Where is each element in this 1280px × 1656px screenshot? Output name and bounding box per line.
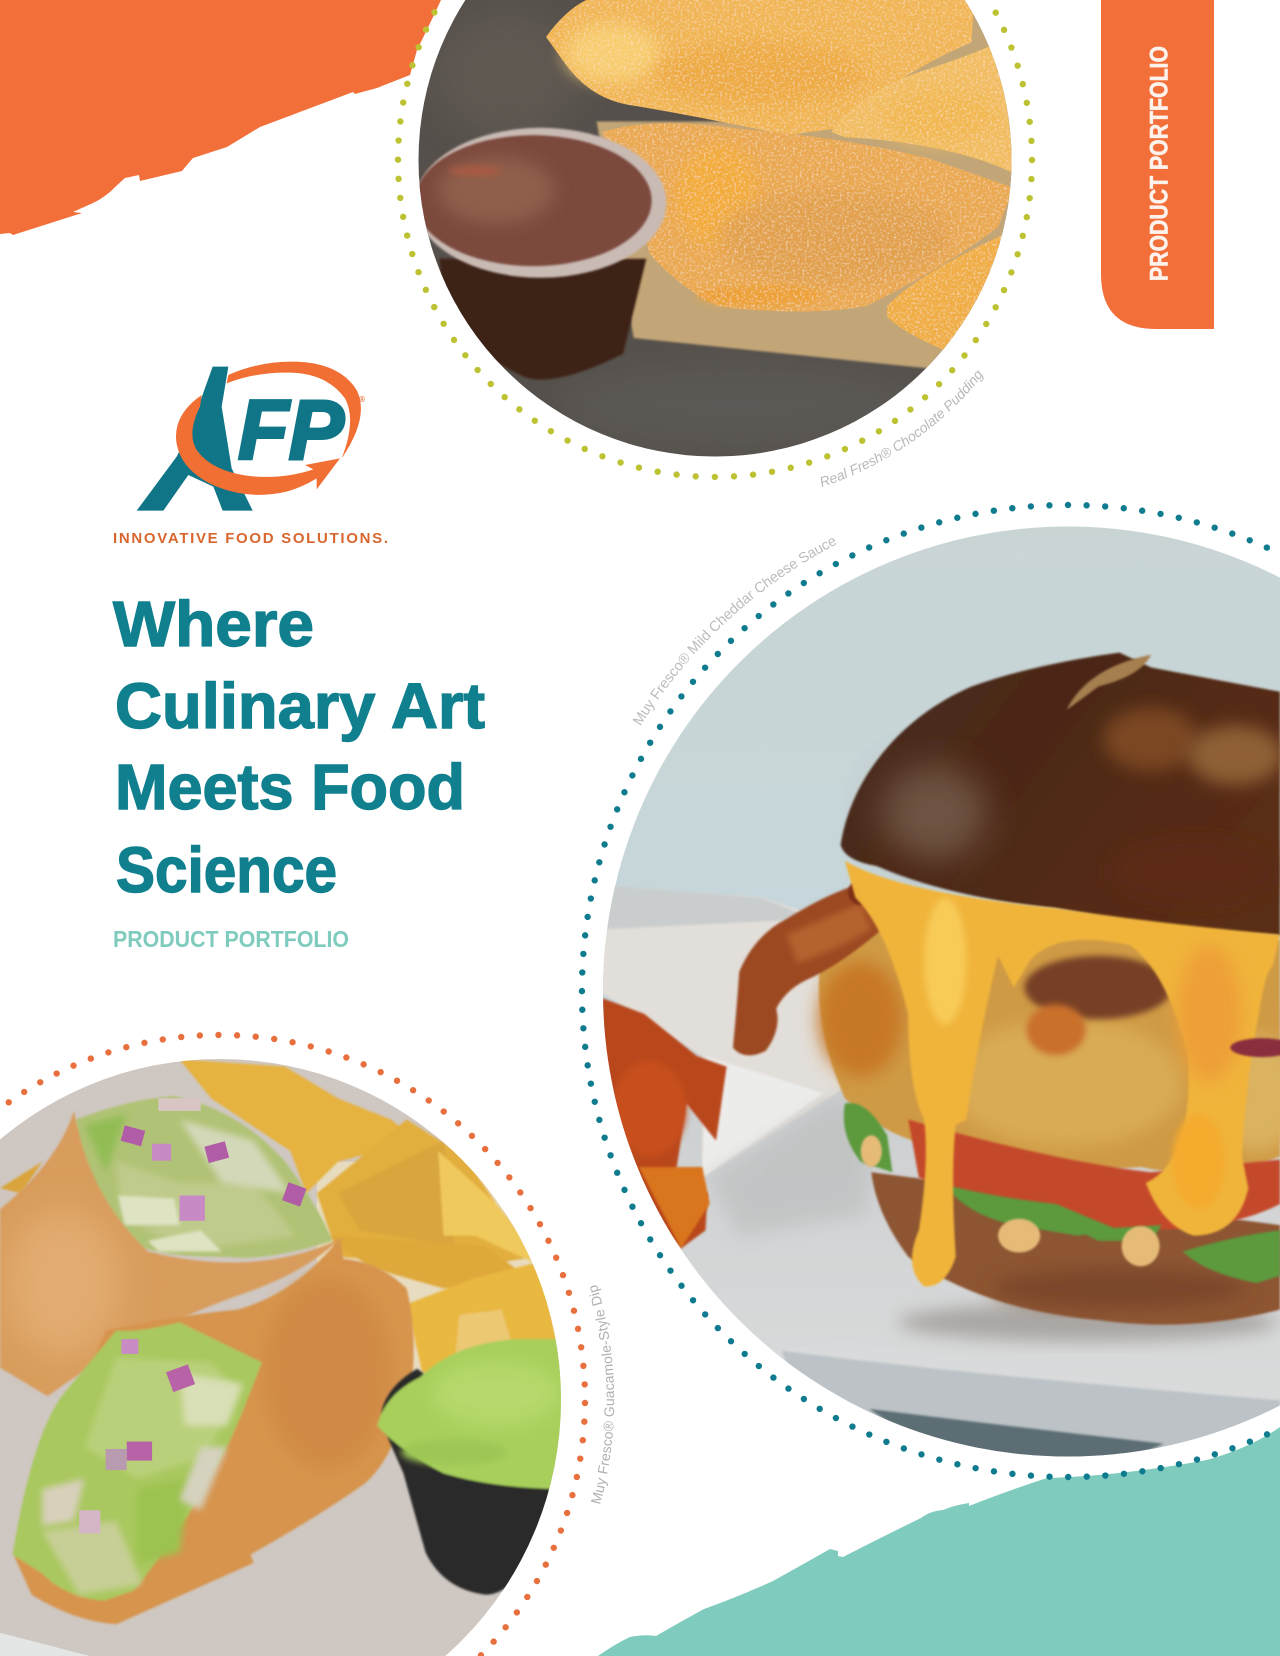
headline (113, 588, 485, 906)
plate (603, 1006, 1280, 1400)
onion pieces lower (79, 1339, 195, 1533)
upper wrap (0, 1096, 343, 1396)
napkin (602, 885, 877, 1236)
onion pieces upper (121, 1098, 306, 1221)
lower wrap (13, 1238, 414, 1624)
photo: empanadas with chocolate pudding (407, 0, 1024, 465)
orange torn-paper shape top left (0, 0, 441, 235)
caption: guacamole dip: Muy Fresco® Guacamole-Style Dip (590, 1285, 614, 1504)
sweet potato chips (602, 998, 727, 1248)
logo letters FP: FP (238, 383, 345, 477)
logo: AFP: ® (359, 395, 365, 404)
tomato (908, 1119, 1280, 1230)
headline: Meets Food (115, 751, 465, 823)
headline: Where (113, 588, 314, 660)
logo swoosh (176, 362, 361, 495)
tortilla chips (0, 1059, 565, 1373)
lettuce (844, 1103, 1280, 1283)
logo letter A (137, 367, 253, 511)
side tab: product portfolio: PRODUCT PORTFOLIO (1146, 46, 1174, 281)
teal torn-paper shape bottom right (598, 1427, 1280, 1656)
subheading: product portfolio: PRODUCT PORTFOLIO (113, 926, 349, 952)
headline: Culinary Art (115, 670, 485, 742)
pastry: top (546, 0, 974, 135)
bottom bun (871, 1172, 1280, 1325)
cheese sauce (845, 861, 1280, 1286)
pudding cup (415, 128, 666, 379)
kraft paper (597, 0, 1014, 370)
pastry: bottom right (887, 234, 1009, 351)
tagline: INNOVATIVE FOOD SOLUTIONS. (113, 530, 388, 547)
dotted ring: burger photo (582, 505, 1280, 1477)
plate edge and shadow (782, 1351, 1280, 1463)
pastry: center (602, 123, 1014, 312)
mayo drips (861, 1135, 1160, 1266)
caption: chocolate pudding: Real Fresh® Chocolate Pudding (820, 370, 984, 487)
photo: chicken burger with cheese sauce (597, 517, 1280, 1468)
top bun (841, 653, 1280, 936)
pastry: right (831, 42, 1016, 174)
red onion (1230, 1038, 1280, 1057)
guacamole cup (377, 1339, 570, 1595)
bacon (733, 880, 882, 1055)
caption: cheese sauce: Muy Fresco® Mild Cheddar Cheese Sauce (632, 538, 836, 726)
headline: Science (116, 834, 337, 906)
photo: chicken avocado wraps with guacamole (0, 1051, 576, 1656)
dotted ring: wrap photo (0, 1035, 585, 1656)
dotted ring: top photo (398, 0, 1032, 477)
fried chicken (818, 919, 1280, 1173)
side tab: product portfolio (1101, 0, 1214, 329)
logo: AFP (137, 362, 365, 511)
